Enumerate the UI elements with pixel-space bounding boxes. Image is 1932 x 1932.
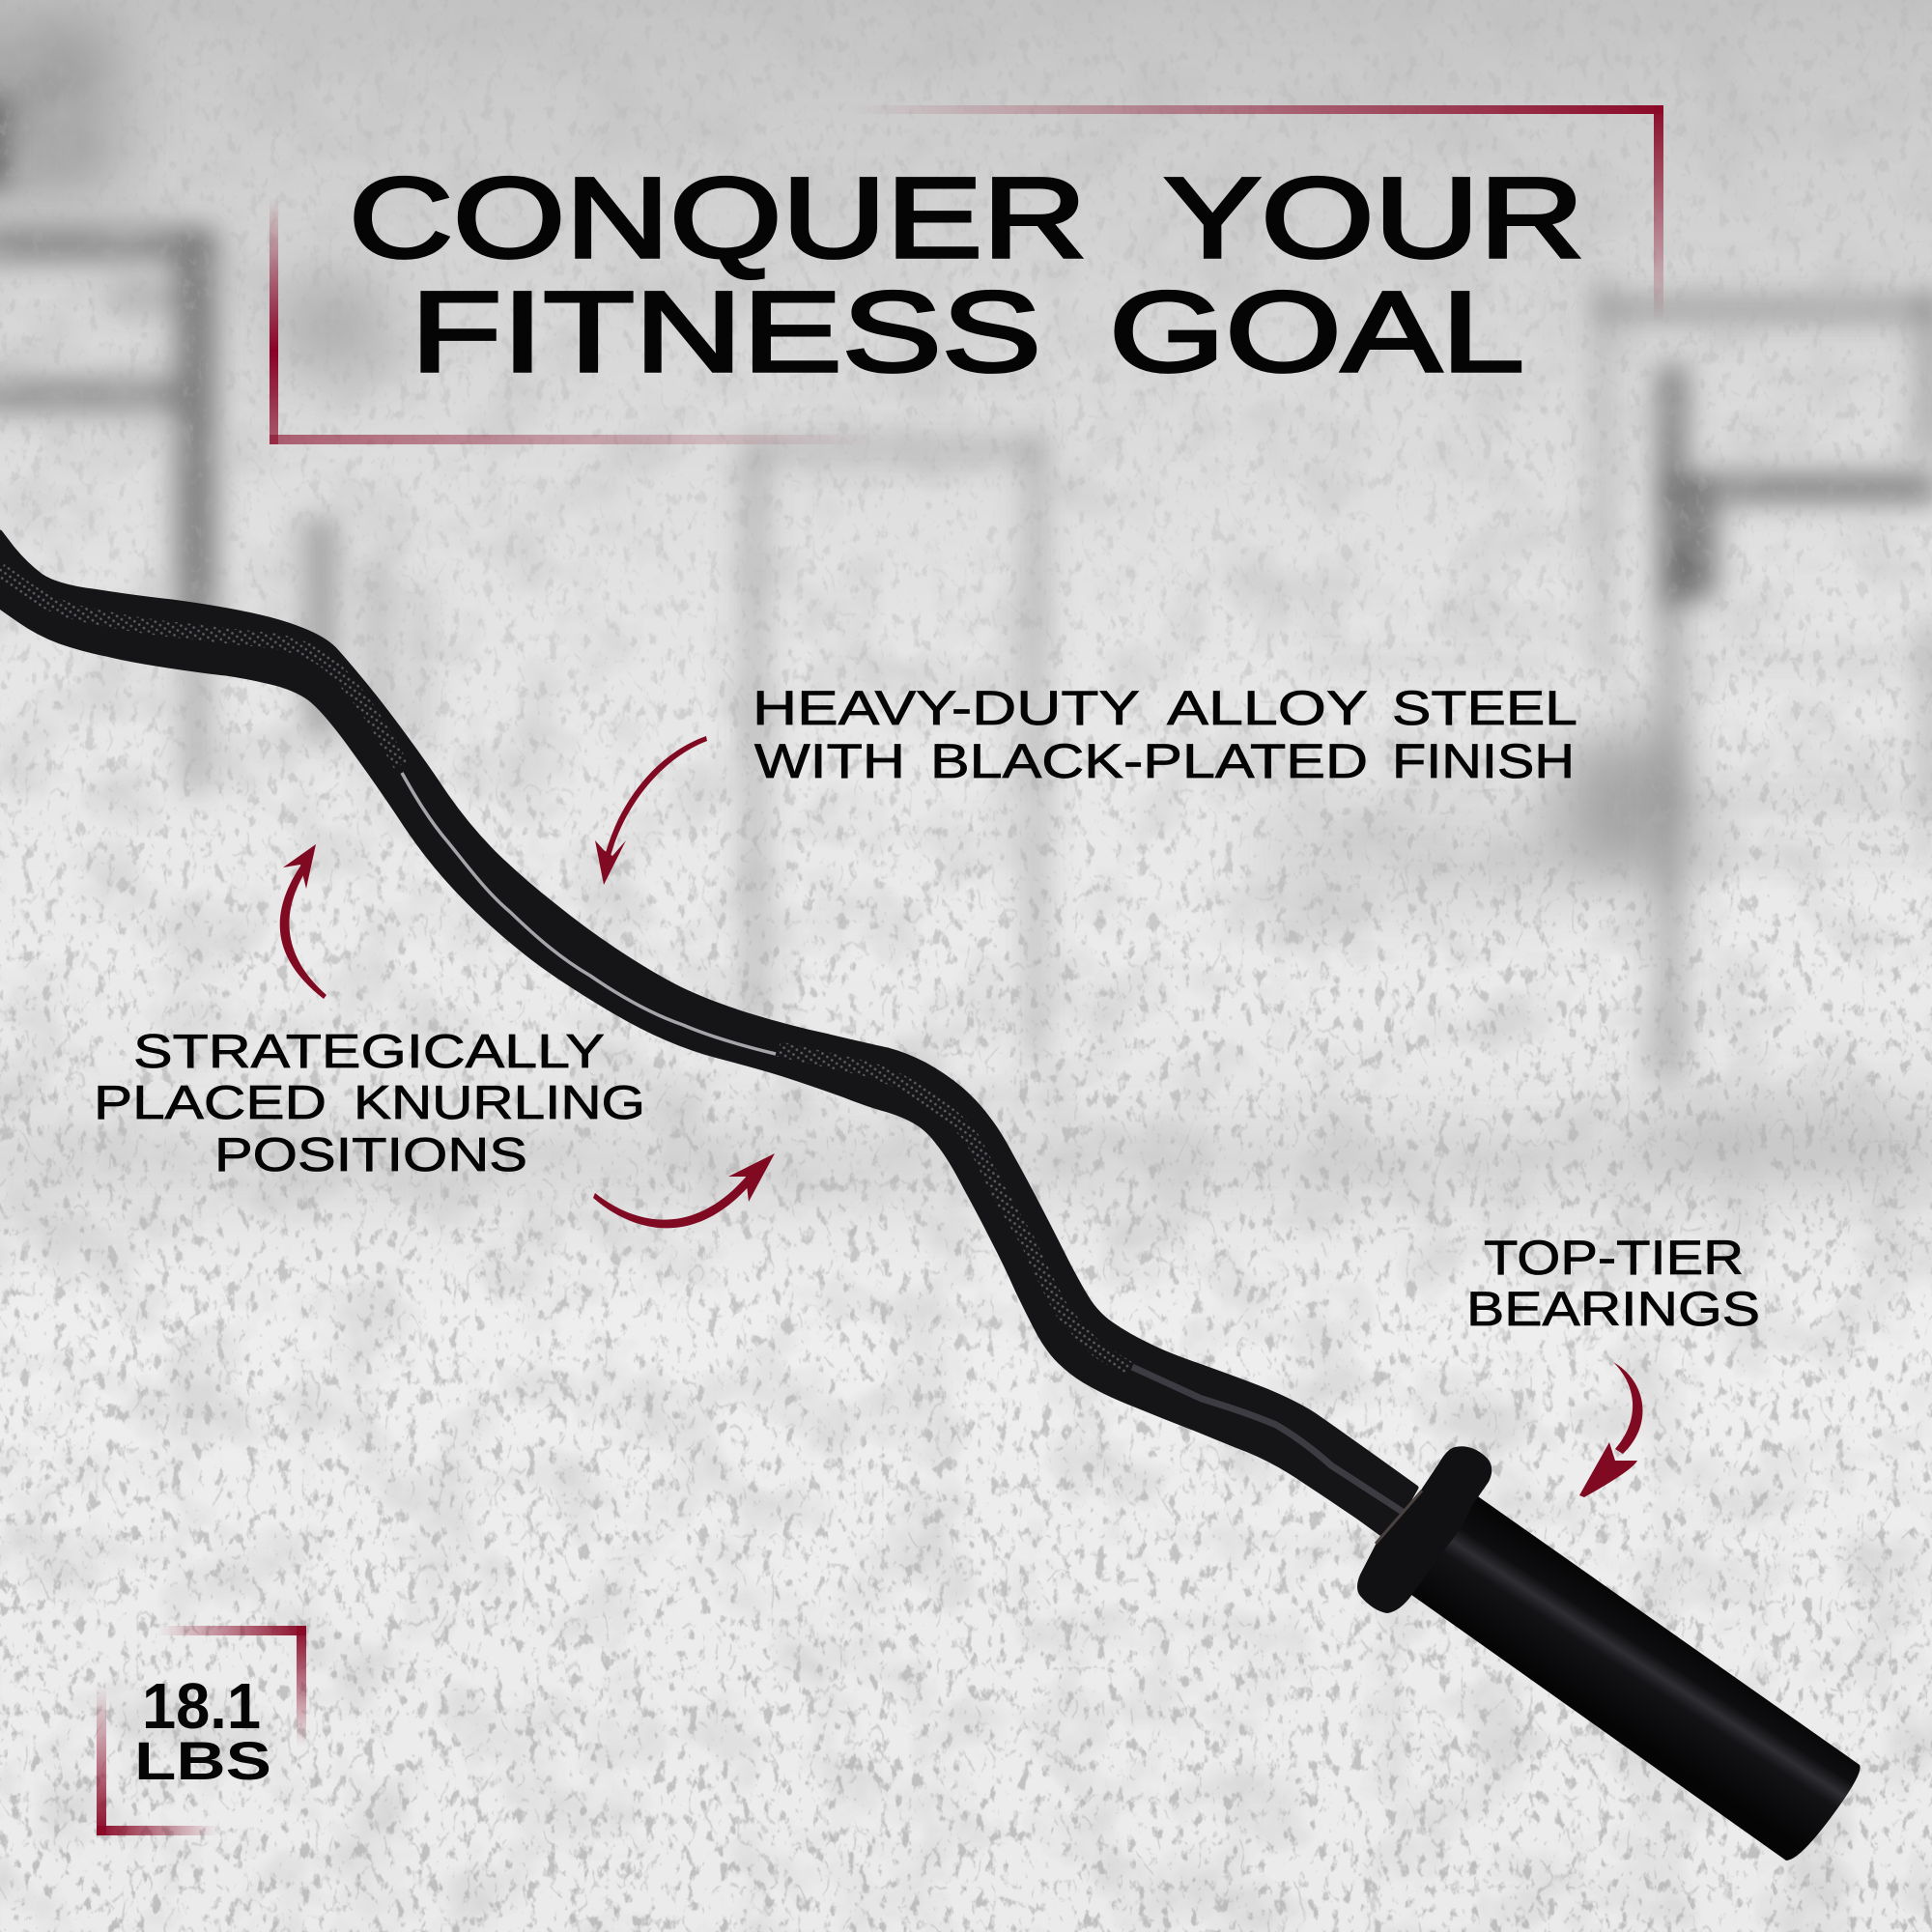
callout text: bearings (1466, 1231, 1760, 1336)
collar rim highlight (1376, 1491, 1422, 1544)
arrow: knurling up (280, 844, 327, 999)
weight badge text: LBS (134, 1730, 271, 1791)
callout text: knurling: STRATEGICALLY (133, 1026, 605, 1078)
title (349, 155, 1584, 396)
callout text: knurling: PLACED (94, 1077, 327, 1129)
bar shaft (0, 532, 1416, 1538)
callout text: alloy steel: HEAVY-DUTY (753, 681, 1140, 735)
title frame (270, 105, 1663, 444)
bar highlight: center section (402, 773, 776, 1054)
callout text: alloy steel: ALLOY (1167, 681, 1368, 735)
weight badge frame (97, 1626, 306, 1835)
sleeve (1391, 1476, 1861, 1861)
title: GOAL (1109, 269, 1524, 396)
bar highlight: right section (1132, 1367, 1406, 1514)
knurling: middle section (779, 1049, 1128, 1369)
weight badge text: 18.1 (142, 1670, 261, 1743)
callout text: knurling: KNURLING (354, 1077, 645, 1129)
callout text: bearings: BEARINGS (1466, 1282, 1760, 1336)
title: CONQUER (349, 155, 1087, 282)
callout text: alloy steel: WITH (754, 734, 905, 788)
callout text: knurling (94, 1026, 645, 1181)
knurling: left section (0, 569, 401, 765)
callout text: alloy steel: FINISH (1392, 734, 1575, 788)
callout text: alloy steel: BLACK-PLATED (930, 734, 1368, 788)
title: YOUR (1164, 155, 1584, 282)
barbell (0, 532, 1861, 1861)
title: FITNESS (411, 269, 1041, 396)
callout text: bearings: TOP-TIER (1484, 1231, 1744, 1285)
weight badge text (134, 1670, 271, 1791)
callout text: knurling: POSITIONS (214, 1129, 527, 1181)
arrow: bearings (1579, 1362, 1643, 1497)
arrow: steel callout (595, 736, 707, 885)
callout text: alloy steel (753, 681, 1577, 788)
arrow: knurling right (593, 1153, 775, 1228)
callout text: alloy steel: STEEL (1392, 681, 1577, 735)
collar (1357, 1446, 1492, 1613)
